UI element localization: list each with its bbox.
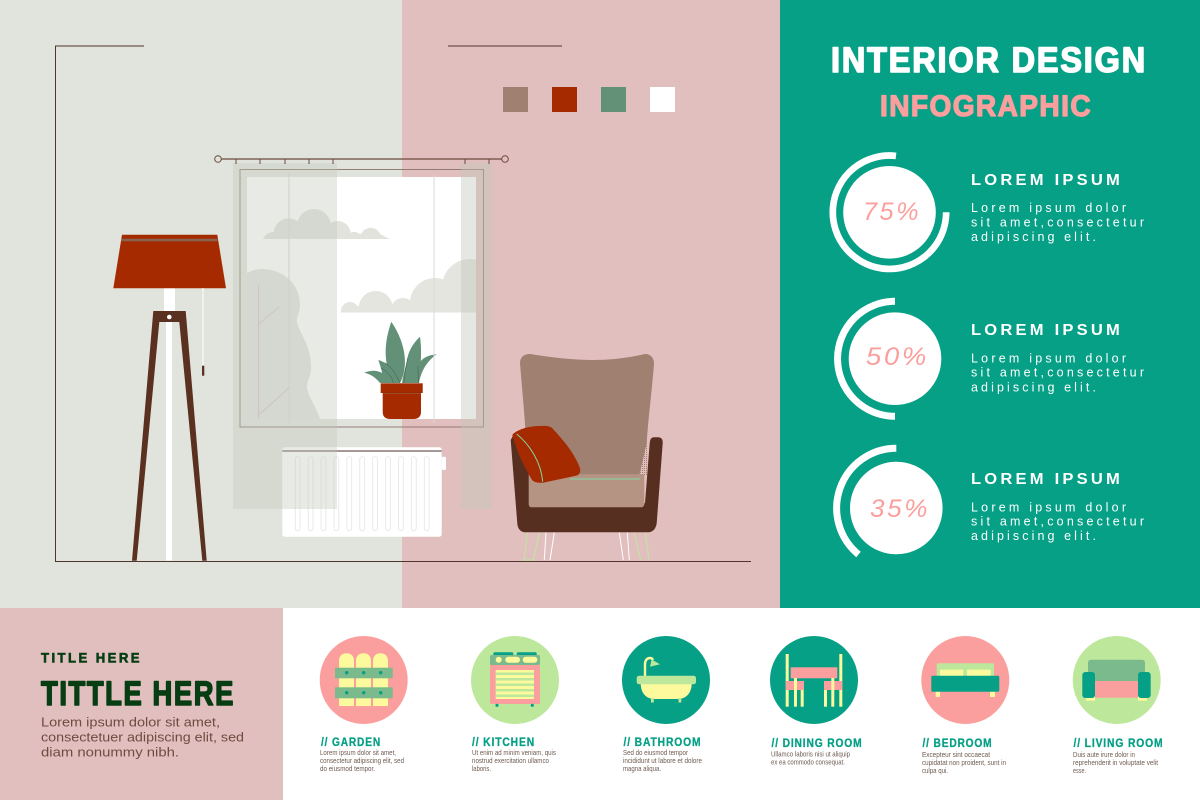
body [971, 500, 1144, 543]
body: sit amet,consectetur [971, 515, 1144, 529]
chair back [520, 354, 654, 480]
body: sit amet,consectetur [971, 366, 1144, 380]
body [971, 201, 1144, 244]
body: sit amet,consectetur [971, 216, 1144, 230]
heading: // DINING ROOM [772, 736, 862, 750]
icon: table and chairs [770, 636, 858, 724]
description: reprehenderit in voluptate velit [1073, 758, 1159, 767]
panel: sage wall [0, 0, 402, 608]
description [1073, 750, 1159, 775]
description: Sed do eiusmod tempor [623, 748, 688, 757]
colour swatches [503, 87, 675, 112]
description [472, 748, 556, 773]
window glass [247, 177, 476, 419]
panel: pink wall [402, 0, 780, 608]
body [971, 351, 1144, 394]
heading: // BEDROOM [922, 736, 992, 750]
pillow seam [517, 434, 543, 482]
icon: oven [471, 636, 559, 724]
description: cupidatat non proident, sunt in [922, 758, 1006, 767]
progress ring [838, 301, 895, 416]
description [922, 750, 1006, 775]
body: Lorem ipsum dolor [971, 201, 1126, 215]
title line 2: INFOGRAPHIC [880, 90, 1092, 123]
body: Lorem ipsum dolor [971, 351, 1126, 365]
heading: // LIVING ROOM [1074, 736, 1164, 750]
chair legs [524, 533, 649, 560]
description: ex ea commodo consequat. [771, 758, 845, 767]
radiator [282, 447, 446, 537]
heading: LOREM IPSUM [971, 322, 1123, 339]
description [320, 748, 404, 773]
room: bedroom [921, 636, 1009, 775]
value: 35% [870, 495, 930, 523]
seat seam [570, 478, 640, 480]
window frame [240, 170, 484, 427]
heading: LOREM IPSUM [971, 471, 1123, 488]
panel: title block background [0, 608, 283, 800]
disc [850, 462, 943, 554]
progress ring [833, 156, 946, 269]
description: nostrud exercitation ullamco [472, 756, 549, 765]
upper cloud [263, 209, 390, 239]
tree [247, 269, 320, 419]
armchair [511, 354, 663, 560]
icon: fence [320, 636, 408, 724]
description: Excepteur sint occaecat [922, 750, 991, 759]
heading: // BATHROOM [624, 735, 702, 749]
block body: consectetuer adipiscing elit, sed [41, 730, 244, 745]
block body: diam nonummy nibh. [41, 745, 179, 760]
description: do eiusmod tempor. [320, 764, 375, 773]
lamp shade [113, 235, 226, 288]
title line 1: INTERIOR DESIGN [831, 41, 1147, 80]
seat cushion [529, 474, 644, 507]
progress ring [837, 448, 896, 554]
value: 50% [866, 343, 929, 371]
description [623, 748, 702, 773]
block body: Lorem ipsum dolor sit amet, [41, 715, 220, 730]
heading: // GARDEN [321, 735, 381, 749]
description: Ut enim ad minim veniam, quis [472, 748, 556, 757]
chair back shading [635, 441, 649, 475]
block heading: TITTLE HERE [41, 675, 235, 713]
lamp pole [164, 288, 175, 560]
heading: LOREM IPSUM [971, 172, 1123, 189]
room: kitchen [471, 636, 559, 773]
body: Lorem ipsum dolor [971, 500, 1126, 514]
description: consectetur adipiscing elit, sed [320, 756, 404, 765]
curtain: right [461, 163, 492, 509]
description: Lorem ipsum dolor sit amet, [320, 748, 396, 757]
icon: sofa [1073, 636, 1161, 724]
curtain folds [289, 173, 434, 423]
body: adipiscing elit. [971, 529, 1096, 543]
room: living room [1073, 636, 1164, 775]
tripod legs [132, 311, 207, 561]
curtain rod [215, 156, 508, 164]
body: adipiscing elit. [971, 230, 1096, 244]
icon: bed [921, 636, 1009, 724]
floor lamp [113, 235, 226, 561]
description: Duis aute irure dolor in [1073, 750, 1135, 759]
body: adipiscing elit. [971, 380, 1096, 394]
pillow [512, 426, 580, 483]
description: incididunt ut labore et dolore [623, 756, 702, 765]
stat: 35% [837, 448, 1144, 554]
room: garden [320, 636, 408, 773]
stat: 50% [838, 301, 1144, 416]
chair frame [511, 434, 663, 532]
block body [41, 715, 244, 760]
curtain: left [233, 163, 337, 509]
description: esse. [1073, 766, 1086, 775]
panel: green sidebar [780, 0, 1200, 608]
lower cloud [340, 259, 476, 312]
eyebrow: TITLE HERE [41, 651, 142, 666]
description: Ullamco laboris nisi ut aliquip [771, 750, 850, 759]
heading: // KITCHEN [472, 735, 535, 749]
description [771, 750, 850, 767]
room: bathroom [622, 636, 710, 773]
disc [843, 166, 936, 259]
window [240, 170, 498, 427]
description: culpa qui. [922, 766, 948, 775]
potted plant [364, 322, 437, 419]
stat: 75% [833, 156, 1144, 269]
title block [41, 651, 244, 760]
value: 75% [863, 198, 921, 226]
pull cord [202, 288, 204, 376]
main title [831, 41, 1147, 123]
room: dining room [770, 636, 862, 767]
room outline [56, 46, 751, 562]
description: magna aliqua. [623, 764, 661, 773]
icon: bathtub [622, 636, 710, 724]
disc [849, 312, 941, 405]
description: laboris. [472, 764, 491, 773]
